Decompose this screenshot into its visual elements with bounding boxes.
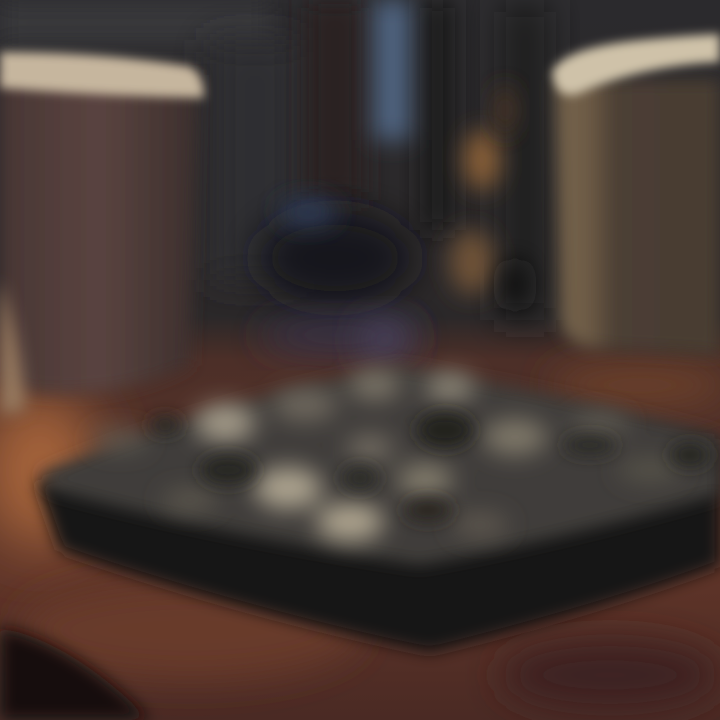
right cup bbox=[552, 34, 720, 355]
tray wells bbox=[149, 412, 710, 522]
tray side bbox=[36, 400, 720, 652]
game tray bbox=[36, 366, 720, 652]
right cup rim bbox=[552, 34, 720, 95]
blue light streak bbox=[374, 0, 410, 140]
left cup rim bbox=[0, 52, 204, 98]
left cup bbox=[0, 52, 204, 415]
tray top bbox=[40, 366, 720, 565]
foreground dark corner bbox=[0, 628, 150, 720]
tray pieces bbox=[92, 370, 682, 541]
central dark object bbox=[257, 197, 420, 360]
orange background figures bbox=[450, 85, 529, 311]
table highlights bbox=[0, 363, 720, 710]
